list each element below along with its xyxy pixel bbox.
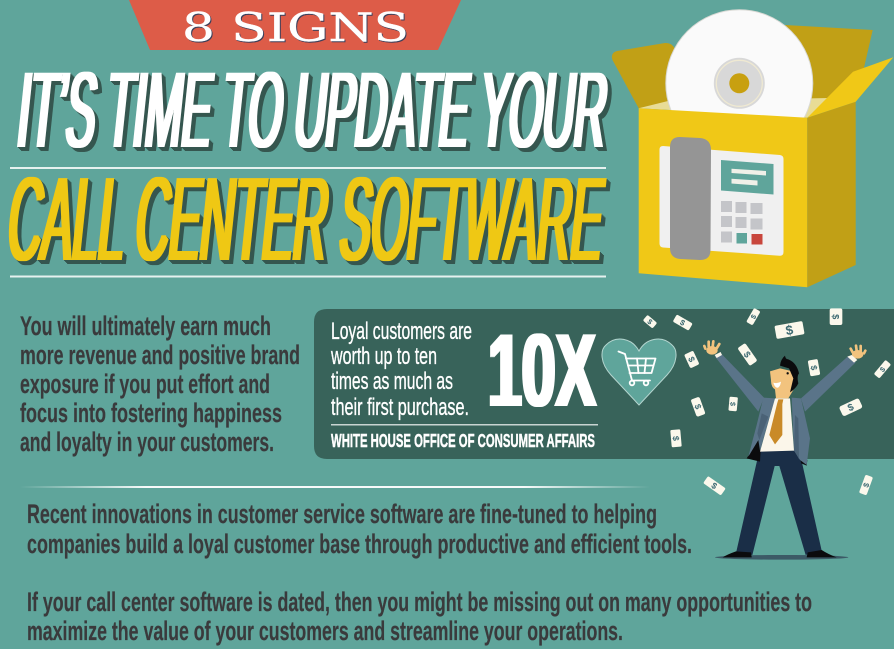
legs [736, 451, 822, 555]
box inside [639, 98, 830, 118]
title rule top [10, 167, 606, 169]
arms [715, 353, 764, 412]
stat rule [331, 424, 598, 426]
falling bills: $ [784, 322, 795, 338]
phone [660, 137, 784, 260]
phone handset [670, 137, 711, 260]
falling bills: $ [728, 402, 737, 406]
title rule bottom [10, 276, 606, 278]
falling bills: $ [831, 314, 841, 320]
jacket dark lining [747, 440, 761, 462]
illustration: businessman with falling money [642, 308, 892, 560]
falling bills: $ [878, 365, 887, 374]
falling bills: $ [749, 313, 758, 321]
hair [780, 356, 799, 392]
falling bills: $ [671, 435, 681, 441]
box right face [807, 102, 856, 287]
paragraph: intro: You will ultimately earn much [20, 311, 271, 341]
box front face [639, 108, 807, 287]
falling bills: $ [741, 350, 753, 360]
box back flap [785, 25, 873, 117]
icon: heart with shopping cart [602, 339, 676, 405]
shadow [715, 555, 848, 560]
paragraph: dated software [27, 587, 812, 646]
falling bills: $ [686, 355, 697, 364]
phone screen [721, 160, 774, 194]
falling bills: $ [846, 402, 856, 414]
divider [20, 486, 650, 488]
stat description: Loyal customers are [331, 318, 472, 345]
box left flap [612, 43, 675, 108]
falling bills: $ [645, 317, 654, 327]
stat description: times as much as [331, 368, 453, 395]
stat: 10X: 10X [488, 313, 596, 429]
falling bills: $ [678, 318, 687, 328]
paragraph: intro: focus into fostering happiness [20, 398, 282, 428]
falling bills: $ [809, 364, 819, 371]
shirt [760, 398, 794, 452]
box right flap [807, 57, 893, 118]
stat description [330, 318, 472, 421]
hands [704, 341, 865, 359]
stat description: worth up to ten [330, 343, 437, 370]
paragraph: intro: exposure if you put effort and [20, 369, 270, 399]
jacket [748, 398, 775, 457]
head [770, 368, 794, 398]
panel: loyal customers stat [314, 309, 894, 459]
banner: 8 signs: 8 SIGNS [182, 6, 409, 51]
tie [769, 399, 783, 444]
phone keys [721, 201, 762, 244]
paragraph: intro: and loyalty in your customers. [20, 427, 274, 457]
shoes [723, 550, 837, 557]
stat description: their first purchase. [331, 394, 469, 421]
stat source: WHITE HOUSE OFFICE OF CONSUMER AFFAIRS [331, 431, 595, 451]
icon: software box with disc and phone [612, 10, 893, 287]
paragraph: intro [20, 311, 300, 457]
disc [666, 10, 813, 157]
banner: 8 signs [129, 0, 461, 51]
falling bills: $ [692, 403, 704, 411]
falling bills: $ [709, 480, 719, 491]
paragraph: intro: more revenue and positive brand [20, 340, 300, 370]
paragraph: recent innovations [27, 499, 692, 559]
falling bills: $ [861, 481, 872, 489]
falling bills [642, 308, 892, 496]
man [704, 341, 865, 557]
